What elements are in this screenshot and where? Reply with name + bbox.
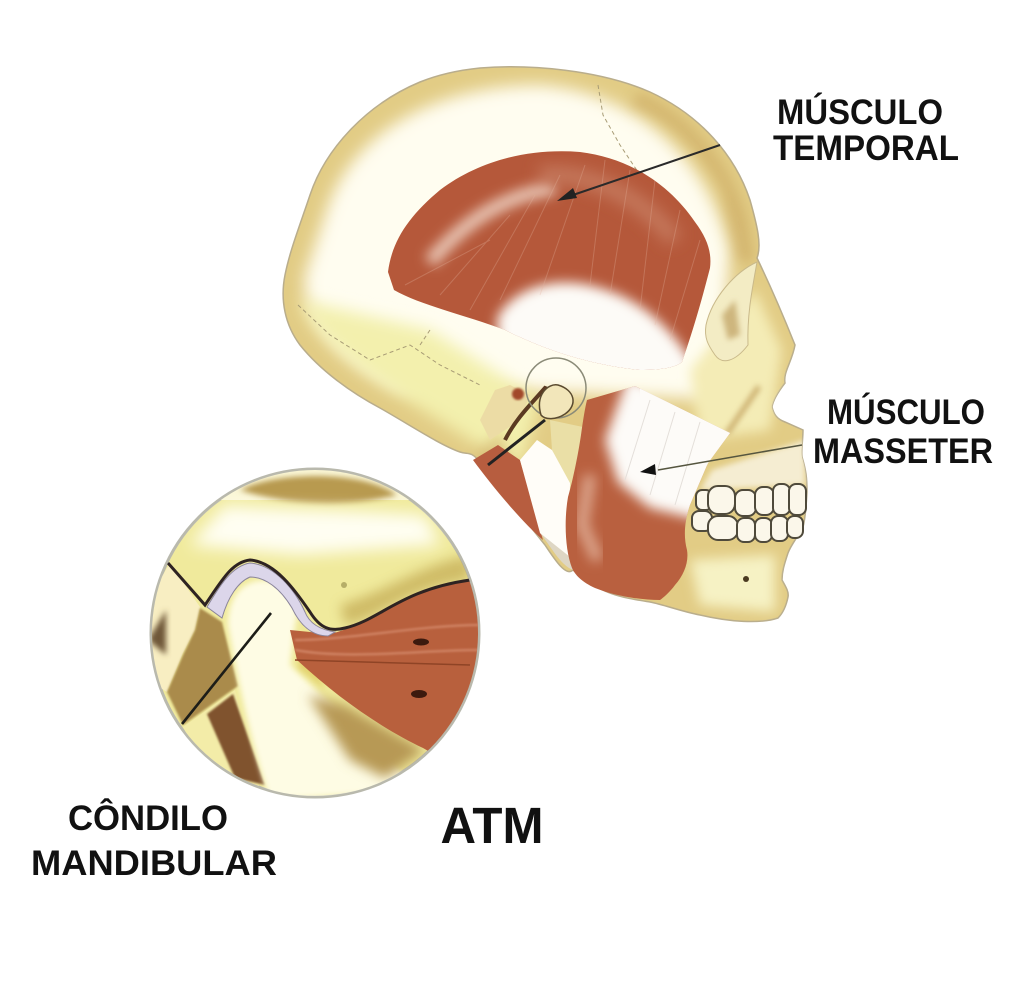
label: ATM: ATM xyxy=(440,797,544,854)
skull shading xyxy=(298,85,805,612)
label: músculo masseter: MÚSCULO xyxy=(827,392,985,432)
white tendon xyxy=(497,282,705,385)
lateral pterygoid muscle xyxy=(290,580,478,751)
skull sutures xyxy=(298,85,640,385)
condyle xyxy=(228,580,420,800)
label: músculo temporal: MÚSCULO xyxy=(777,92,943,132)
top bone band xyxy=(221,470,409,500)
label: temporal second line: TEMPORAL xyxy=(773,129,959,168)
joint disc xyxy=(207,563,335,636)
condyle pointer line xyxy=(182,613,271,724)
masseter muscle arrow xyxy=(640,445,802,475)
inset circle: temporomandibular joint detail xyxy=(148,460,485,800)
skull base shape xyxy=(283,67,807,622)
left bone xyxy=(148,563,200,692)
masseter muscle xyxy=(566,386,730,600)
temporal muscle xyxy=(388,151,710,370)
temporomandibular joint circle xyxy=(480,358,586,465)
brown region under joint xyxy=(167,608,238,725)
shading along fossa xyxy=(340,555,470,625)
pale lower left xyxy=(183,690,260,790)
mental foramen dot xyxy=(743,576,749,582)
muscle arrowheads xyxy=(413,638,429,646)
teeth xyxy=(692,484,806,542)
label: mandibular: MANDIBULAR xyxy=(31,844,277,883)
cheek bone xyxy=(725,385,761,435)
label: côndilo: CÔNDILO xyxy=(68,798,228,838)
eye socket and ear region xyxy=(705,262,757,361)
label: masseter second line: MASSETER xyxy=(813,432,993,471)
icon: skull illustration with muscles xyxy=(283,67,807,622)
jaw ramus and white ligament xyxy=(473,420,587,570)
temporal muscle arrow xyxy=(557,145,720,201)
joint fossa outline xyxy=(168,560,470,629)
upper gum xyxy=(700,440,805,490)
